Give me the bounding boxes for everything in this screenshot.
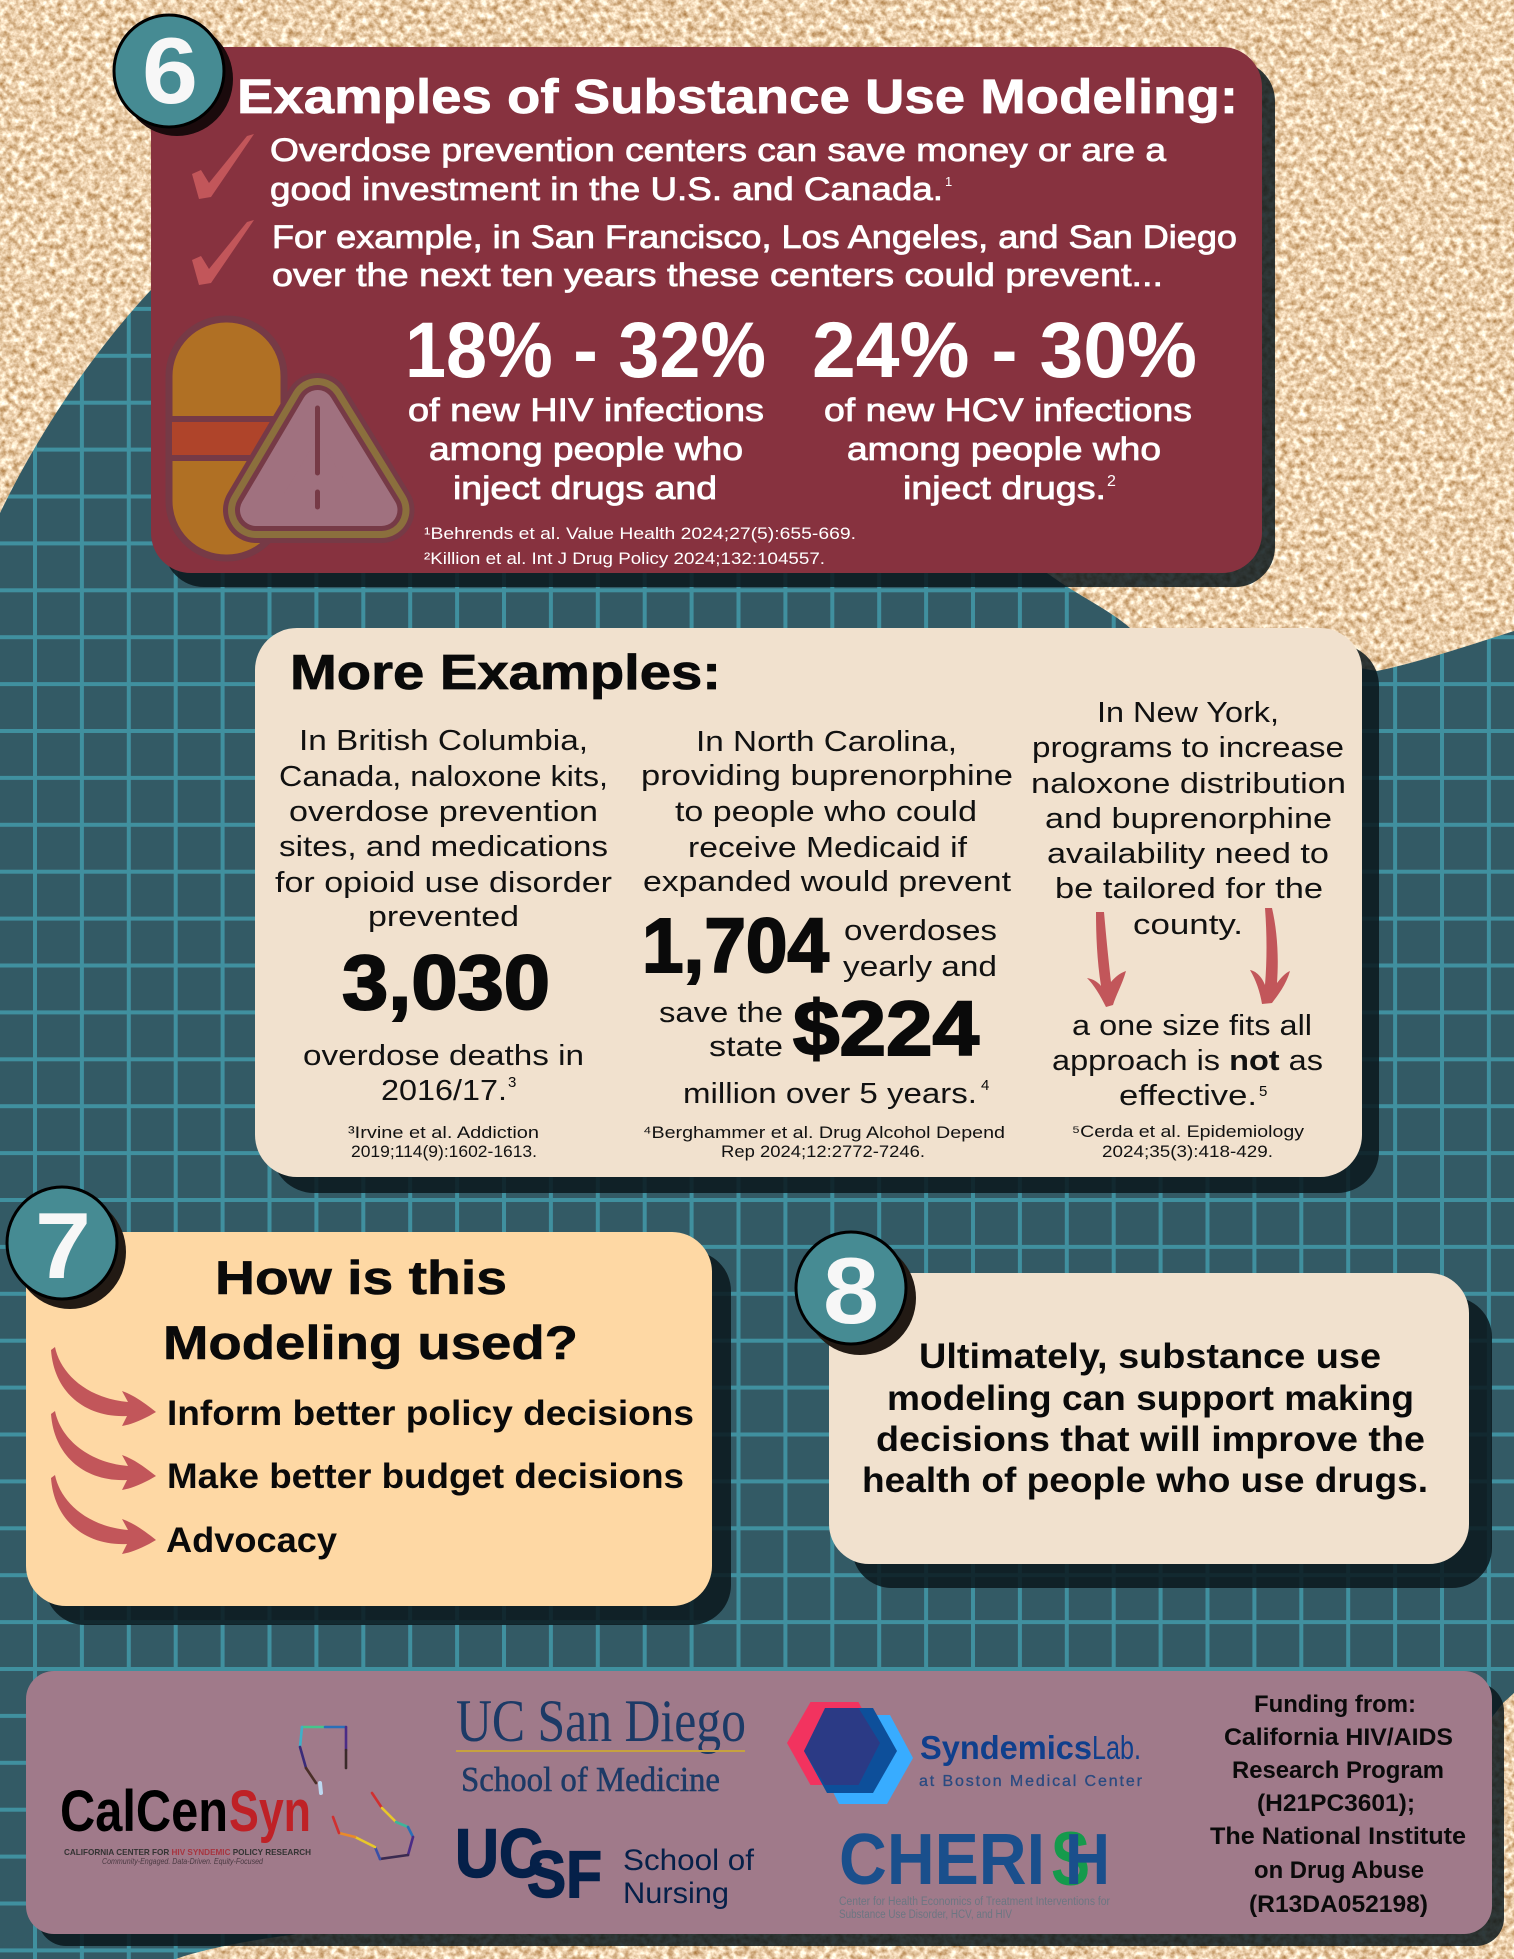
- column: new york: county.: [1133, 909, 1243, 941]
- column: british columbia: 3,030: [342, 940, 550, 1026]
- column: british columbia: overdose prevention: [289, 796, 598, 828]
- logo: syndemics lab: Syndemics: [920, 1729, 1092, 1766]
- stat: HIV infections: of new HIV infections: [408, 392, 764, 428]
- logo: ucsf school of nursing: [455, 1815, 755, 1911]
- logo: calcensyn: Community-Engaged. Data-Driven. Equity-Focused: [102, 1857, 263, 1866]
- logo: cherish: S: [1051, 1817, 1090, 1902]
- column: north carolina: [641, 726, 1013, 1161]
- logo: uc san diego school of medicine: [456, 1688, 746, 1799]
- column: north carolina: million over 5 years.: [683, 1078, 977, 1110]
- column: north carolina: ⁴Berghammer et al. Drug Alcohol Depend: [643, 1123, 1005, 1142]
- badge: number 8: 8: [823, 1238, 879, 1343]
- text: conclusion: health of people who use drugs.: [862, 1461, 1428, 1500]
- logo: uc san diego school of medicine: School of Medicine: [461, 1760, 720, 1799]
- stat: HCV infections: [812, 305, 1197, 506]
- column: british columbia: [275, 725, 612, 1161]
- column: north carolina: $224: [793, 986, 979, 1072]
- stat: HIV infections: [405, 305, 766, 506]
- icon: pill with warning triangle: [169, 319, 382, 558]
- logo: cherish: Center for Health Economics of Treatment Interventions for: [839, 1896, 1110, 1908]
- column: north carolina: 1,704: [642, 903, 829, 989]
- heading: examples of substance use modeling: Examples of Substance Use Modeling:: [237, 71, 1238, 124]
- list item: budget: Make better budget decisions: [167, 1457, 684, 1496]
- text: overdose prevention centers: 1: [945, 174, 952, 189]
- panel: ultimately conclusion: [829, 1273, 1492, 1588]
- text: funding sources: [1210, 1691, 1466, 1918]
- panel: footer logos and funding: [26, 1671, 1504, 1946]
- heading: how is this modeling used: How is this: [215, 1251, 507, 1304]
- column: north carolina: overdoses: [844, 915, 997, 947]
- column: new york: and buprenorphine: [1045, 803, 1332, 835]
- logo: cherish: Substance Use Disorder, HCV, and HIV: [839, 1909, 1012, 1921]
- column: british columbia: prevented: [368, 901, 519, 933]
- column: british columbia: for opioid use disorder: [275, 867, 612, 899]
- column: north carolina: providing buprenorphine: [641, 760, 1013, 792]
- text: funding sources: California HIV/AIDS: [1224, 1724, 1453, 1751]
- arrow: to inform: [51, 1347, 156, 1426]
- logo: cherish: [839, 1817, 1110, 1921]
- arrow: to advocacy: [51, 1475, 156, 1554]
- icon: check mark one: [192, 134, 254, 199]
- badge: number 6: 6: [142, 18, 198, 123]
- heading: how is this modeling used: Modeling used?: [163, 1316, 578, 1369]
- logo: cherish: CHERI: [839, 1820, 1045, 1900]
- text: overdose prevention centers: good investment in the U.S. and Canada.: [270, 171, 943, 207]
- icon: check mark two: [192, 220, 254, 285]
- text: funding sources: Funding from:: [1254, 1691, 1416, 1718]
- badge: number 6: [114, 15, 233, 136]
- column: north carolina: Rep 2024;12:2772-7246.: [721, 1142, 925, 1161]
- logo: ucsf school of nursing: Nursing: [623, 1877, 729, 1910]
- text: conclusion: decisions that will improve the: [876, 1420, 1425, 1459]
- stat: HCV infections: of new HCV infections: [824, 392, 1192, 428]
- text: funding sources: (H21PC3601);: [1257, 1790, 1415, 1817]
- text: san francisco example: [272, 219, 1237, 293]
- stat: HCV infections: among people who: [847, 431, 1161, 467]
- column: north carolina: 4: [981, 1077, 989, 1094]
- column: british columbia: overdose deaths in: [303, 1040, 584, 1072]
- column: new york: [1031, 697, 1346, 1161]
- column: new york: ⁵Cerda et al. Epidemiology: [1072, 1122, 1305, 1141]
- logo: syndemics lab: Lab.: [1092, 1729, 1141, 1766]
- panel: more examples: [255, 628, 1379, 1193]
- badge: number 7: [7, 1187, 126, 1309]
- column: new york: effective.: [1119, 1080, 1257, 1112]
- stat: HCV infections: inject drugs.: [903, 470, 1106, 506]
- text: references one and two: [424, 524, 856, 568]
- list item: advocacy: Advocacy: [166, 1521, 338, 1560]
- logo: syndemics lab: at Boston Medical Center: [919, 1773, 1143, 1790]
- text: conclusion: [862, 1337, 1428, 1500]
- list item: inform: Inform better policy decisions: [167, 1394, 694, 1433]
- logo: uc san diego school of medicine: UC San Diego: [456, 1688, 746, 1754]
- column: north carolina: yearly and: [843, 951, 997, 983]
- column: new york: availability need to: [1047, 838, 1329, 870]
- text: san francisco example: over the next ten years these centers could prevent...: [272, 257, 1163, 293]
- logo: syndemics lab: [787, 1702, 1143, 1804]
- column: north carolina: expanded would prevent: [643, 866, 1011, 898]
- column: british columbia: 2016/17.: [381, 1075, 507, 1107]
- column: new york: approach is not as: [1052, 1045, 1323, 1077]
- panel: section 6 substance use modeling examples: [151, 47, 1275, 587]
- column: north carolina: In North Carolina,: [696, 726, 957, 758]
- column: british columbia: ³Irvine et al. Addiction: [348, 1123, 539, 1142]
- arrow: to budget: [51, 1411, 156, 1490]
- text: overdose prevention centers: [270, 132, 1166, 207]
- text: references one and two: ²Killion et al. Int J Drug Policy 2024;132:104557.: [424, 549, 825, 568]
- stat: HIV infections: among people who: [429, 431, 743, 467]
- arrow: down right: [1250, 908, 1290, 1004]
- column: new york: In New York,: [1097, 697, 1279, 729]
- logo: calcensyn: [60, 1727, 413, 1866]
- column: new york: naloxone distribution: [1031, 768, 1346, 800]
- logo: calcensyn: CalCen: [60, 1779, 228, 1844]
- column: british columbia: Canada, naloxone kits,: [279, 761, 608, 793]
- arrow: down left: [1087, 912, 1126, 1007]
- logo: calcensyn: CALIFORNIA CENTER FOR HIV SYNDEMIC POLICY RESEARCH: [64, 1847, 311, 1857]
- text: overdose prevention centers: Overdose prevention centers can save money or are a: [270, 132, 1166, 168]
- logo: cherish: H: [1065, 1820, 1110, 1900]
- text: references one and two: ¹Behrends et al. Value Health 2024;27(5):655-669.: [424, 524, 856, 543]
- text: funding sources: (R13DA052198): [1249, 1891, 1428, 1918]
- heading: more examples: More Examples:: [290, 646, 721, 700]
- column: british columbia: 2019;114(9):1602-1613.: [351, 1142, 537, 1161]
- column: north carolina: to people who could: [675, 796, 977, 828]
- column: north carolina: state: [709, 1031, 783, 1063]
- logo: ucsf school of nursing: School of: [623, 1844, 755, 1877]
- column: british columbia: 3: [508, 1074, 516, 1091]
- column: new york: be tailored for the: [1055, 873, 1323, 905]
- stat: HCV infections: 24% - 30%: [812, 305, 1197, 394]
- text: funding sources: on Drug Abuse: [1254, 1857, 1424, 1884]
- column: north carolina: receive Medicaid if: [688, 832, 968, 864]
- column: new york: a one size fits all: [1072, 1010, 1312, 1042]
- logo: ucsf school of nursing: UC: [455, 1815, 543, 1892]
- text: conclusion: modeling can support making: [887, 1379, 1414, 1418]
- column: new york: 5: [1259, 1083, 1267, 1100]
- column: british columbia: In British Columbia,: [299, 725, 588, 757]
- text: conclusion: Ultimately, substance use: [919, 1337, 1381, 1376]
- stat: HCV infections: 2: [1107, 473, 1116, 490]
- text: funding sources: Research Program: [1232, 1757, 1444, 1784]
- panel: how is this modeling used: [26, 1232, 731, 1625]
- icon: california outline: [300, 1727, 413, 1859]
- badge: number 8: [796, 1232, 916, 1355]
- column: north carolina: save the: [659, 997, 783, 1029]
- text: funding sources: The National Institute: [1210, 1823, 1466, 1850]
- logo: ucsf school of nursing: SF: [527, 1837, 602, 1911]
- stat: HIV infections: 18% - 32%: [405, 305, 766, 394]
- heading: how is this modeling used: [163, 1251, 578, 1369]
- text: san francisco example: For example, in San Francisco, Los Angeles, and San Diego: [272, 219, 1237, 255]
- stat: HIV infections: inject drugs and: [453, 470, 717, 506]
- column: british columbia: sites, and medications: [279, 831, 608, 863]
- column: new york: 2024;35(3):418-429.: [1102, 1142, 1273, 1161]
- badge: number 7: 7: [35, 1193, 91, 1298]
- column: new york: programs to increase: [1032, 732, 1344, 764]
- logo: calcensyn: Syn: [229, 1779, 311, 1844]
